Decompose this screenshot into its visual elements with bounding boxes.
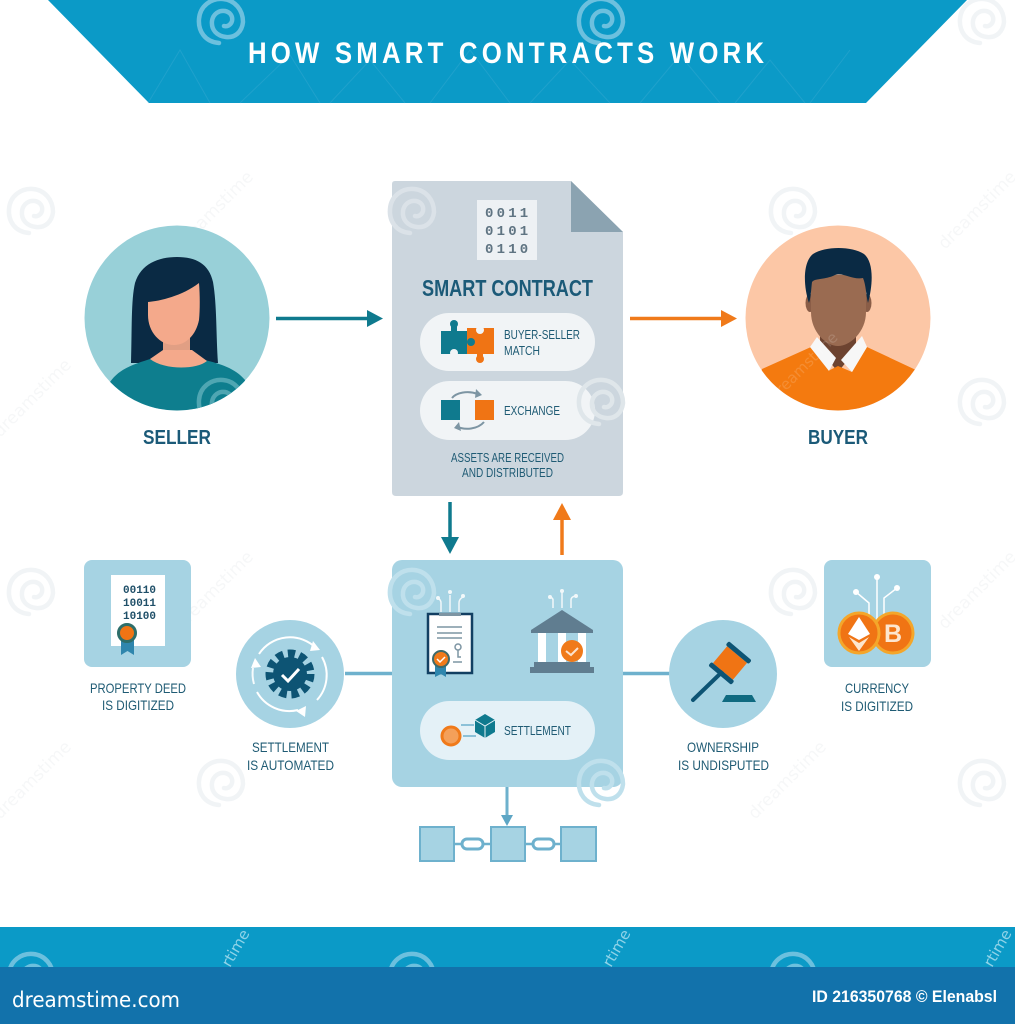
panel: currency: B — [884, 620, 902, 648]
caption: IS AUTOMATED — [247, 757, 334, 773]
panel: property deed — [84, 560, 191, 713]
binary code box — [477, 200, 537, 260]
pill: buyer-seller match: BUYER-SELLER — [504, 327, 580, 342]
seller avatar — [84, 226, 270, 449]
page watermarks: dreamstime — [171, 167, 258, 254]
caption: SETTLEMENT — [252, 739, 329, 755]
footer band — [0, 926, 1015, 1024]
panel: ownership undisputed — [669, 620, 777, 773]
pill: exchange: EXCHANGE — [504, 403, 560, 418]
heading: smart contract: SMART CONTRACT — [422, 275, 593, 301]
arrow: contract to buyer — [630, 310, 737, 327]
assets caption: AND DISTRIBUTED — [462, 465, 553, 480]
assets caption — [451, 450, 564, 480]
title: HOW SMART CONTRACTS WORK — [248, 36, 764, 69]
buyer avatar — [746, 226, 930, 449]
panel: property deed: 10100 — [123, 611, 156, 623]
pill: exchange — [420, 380, 623, 440]
icon: digital contract — [428, 590, 472, 677]
caption: CURRENCY — [845, 680, 910, 696]
caption — [247, 739, 334, 773]
caption — [90, 680, 186, 713]
caption: IS UNDISPUTED — [678, 757, 769, 773]
pill: buyer-seller match: MATCH — [504, 343, 540, 358]
header banner — [48, 0, 967, 103]
assets caption: ASSETS ARE RECEIVED — [451, 450, 564, 465]
panel: property deed: 10011 — [123, 598, 156, 610]
caption: IS DIGITIZED — [841, 698, 913, 714]
panel: settlement automated — [236, 620, 344, 773]
page watermarks: dreamstime — [744, 737, 831, 824]
panel: settlement — [390, 560, 623, 805]
footer band: rtime — [599, 926, 634, 970]
panel: currency — [824, 560, 931, 714]
page watermarks: dreamstime — [171, 547, 258, 634]
footer brand: dreamstime.com — [12, 988, 180, 1012]
pill: settlement — [420, 701, 595, 760]
pill: buyer-seller match — [420, 313, 595, 371]
blockchain — [420, 827, 596, 861]
caption: IS DIGITIZED — [102, 697, 174, 713]
binary code box: 0110 — [485, 242, 531, 258]
arrow: settlement to blockchain — [501, 787, 513, 826]
binary code box: 0101 — [485, 224, 531, 240]
binary code box: 0011 — [485, 206, 531, 222]
panel: smart contract document — [390, 181, 623, 496]
caption: OWNERSHIP — [687, 739, 759, 755]
footer band: rtime — [218, 926, 253, 970]
page fold — [571, 181, 623, 232]
seller label: SELLER — [143, 427, 211, 449]
caption: PROPERTY DEED — [90, 680, 186, 696]
caption — [678, 739, 769, 773]
connector lines — [345, 672, 670, 675]
buyer avatar: dreamstime — [765, 328, 842, 405]
arrow: seller to contract — [276, 310, 383, 327]
icon: bank — [530, 589, 594, 673]
caption — [841, 680, 913, 714]
panel: property deed: 00110 — [123, 585, 156, 597]
arrow: contract down to settlement — [441, 502, 459, 554]
arrow: settlement up to contract — [553, 503, 571, 555]
footer image id: ID 216350768 © Elenabsl — [812, 987, 997, 1006]
pill: settlement: SETTLEMENT — [504, 723, 571, 738]
buyer label: BUYER — [808, 427, 868, 449]
footer band: rtime — [980, 926, 1015, 970]
